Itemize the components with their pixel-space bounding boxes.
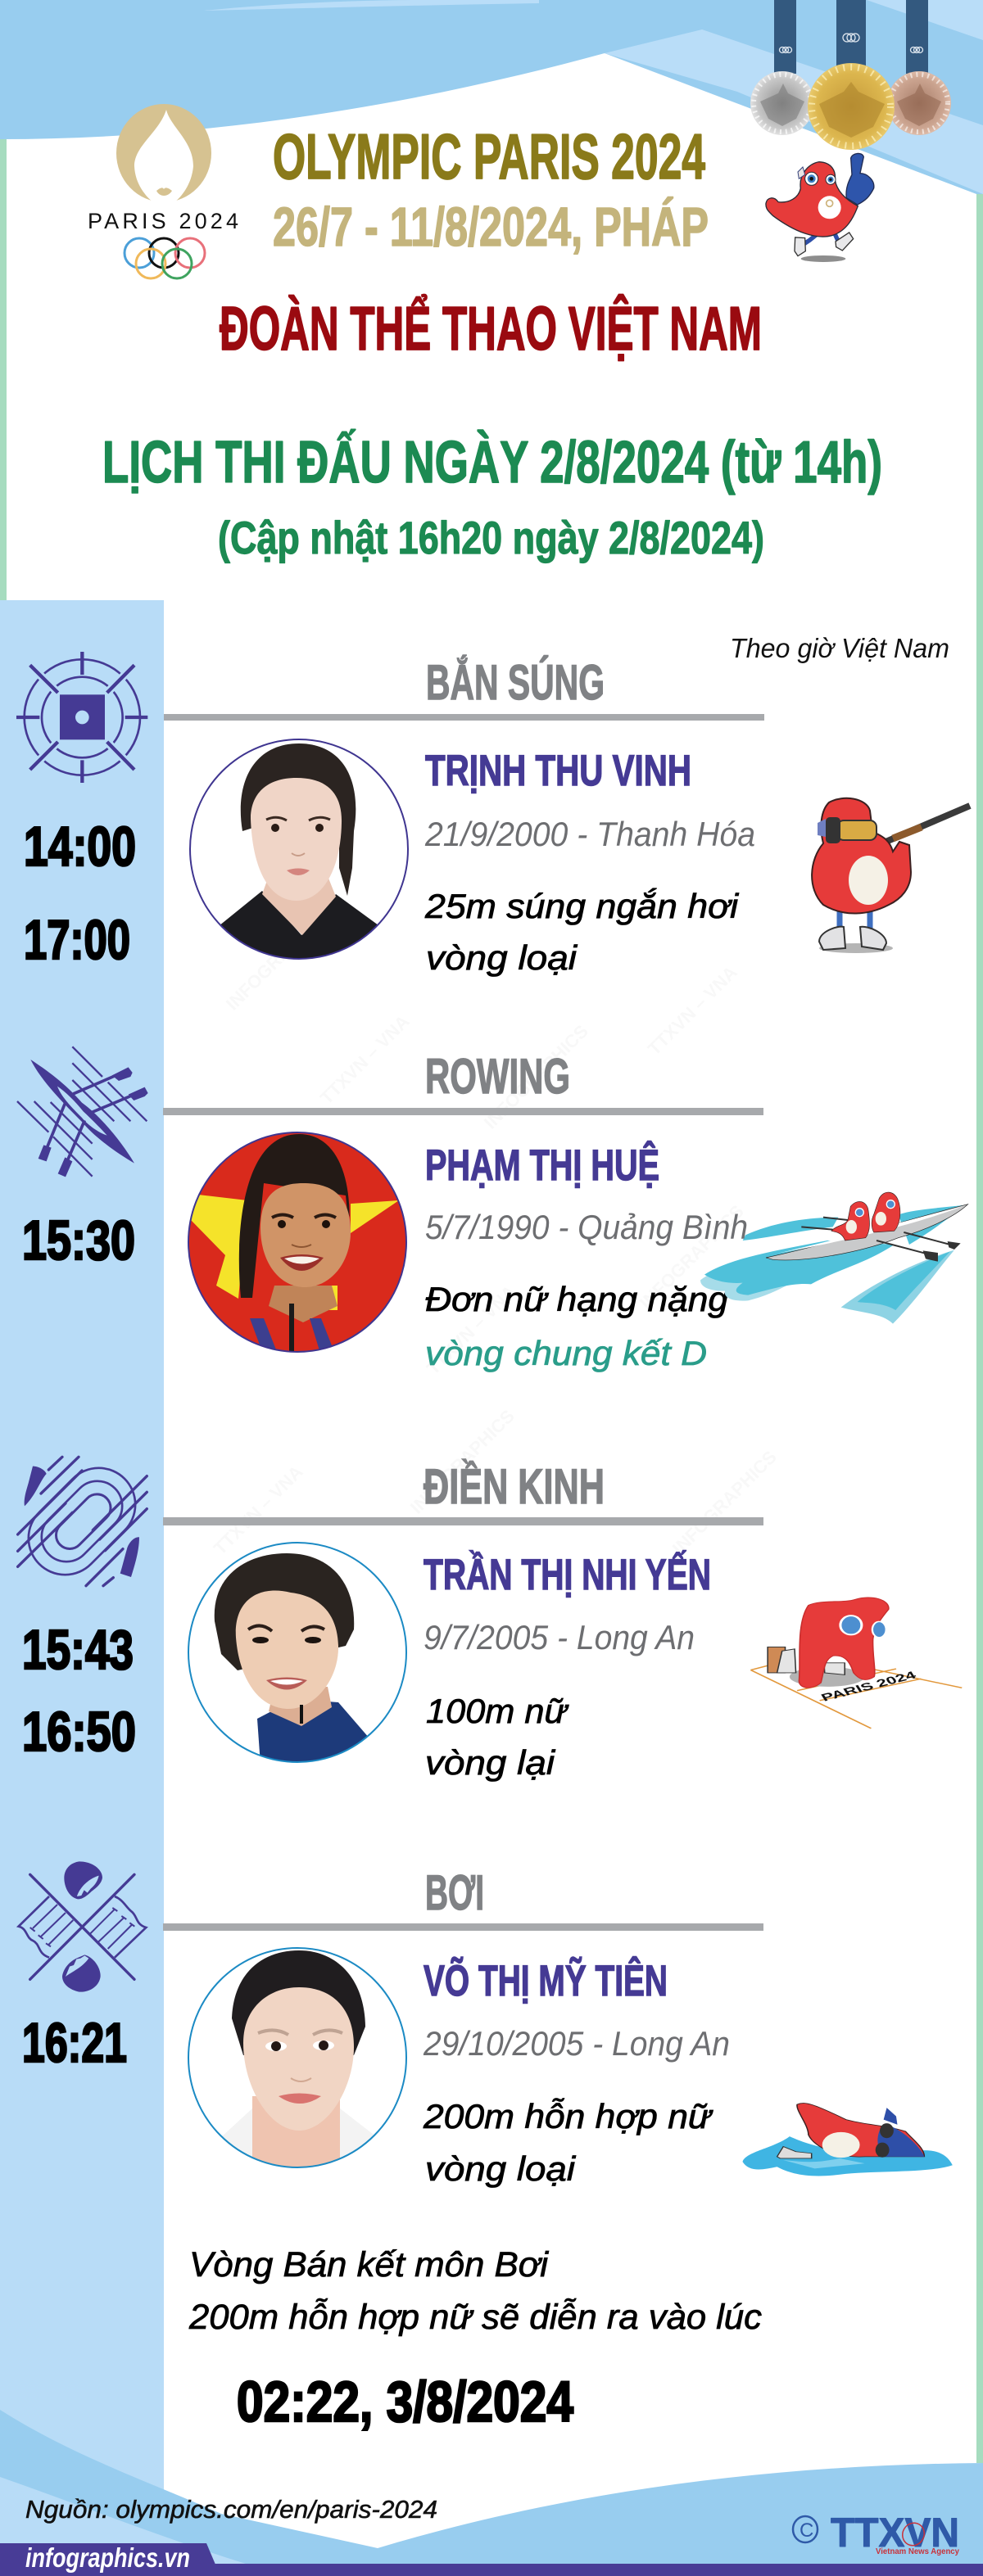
icon: swimming lanes [19, 1861, 146, 1992]
icon: running track [13, 1453, 151, 1590]
agency tagline: Vietnam News Agency [876, 2547, 959, 2556]
title line 1: OLYMPIC PARIS 2024 [273, 120, 705, 192]
birth info: 29/10/2005 - Long An [423, 2024, 730, 2063]
mascots: rowers [700, 1192, 968, 1324]
flame emblem [116, 104, 211, 203]
athlete photo [187, 1131, 410, 1358]
event: vòng loại [426, 938, 578, 977]
mascot: sprinter: PARIS 2024 [818, 1669, 919, 1704]
event: vòng loại [425, 2149, 577, 2188]
gold medal [808, 63, 895, 150]
note: semifinal: 200m hỗn hợp nữ sẽ diễn ra vào lúc [188, 2298, 762, 2337]
watermarks: INFOGRAPHICS [636, 1201, 748, 1313]
times: 17:00 [24, 909, 130, 971]
event: vòng chung kết D [425, 1334, 707, 1372]
event: 200m hỗn hợp nữ [423, 2097, 714, 2135]
category heading: BẮN SÚNG [426, 655, 605, 710]
birth info: 21/9/2000 - Thanh Hóa [424, 815, 755, 853]
athlete photo [187, 1946, 410, 2172]
times: 16:50 [22, 1701, 136, 1763]
event [423, 2097, 714, 2188]
olympic rings [125, 238, 205, 278]
bronze medal [887, 71, 951, 135]
watermarks: TTXVN – VNA [316, 1011, 414, 1109]
copyright mark: C [800, 2520, 813, 2542]
update note: (Cập nhật 16h20 ngày 2/8/2024) [218, 512, 764, 563]
agency name: TTXVN [831, 2510, 959, 2556]
panel: rowing [17, 1046, 968, 1372]
watermarks: TTXVN – VNA [210, 1462, 307, 1559]
title line 2: 26/7 - 11/8/2024, PHÁP [273, 197, 709, 258]
athlete name: TRỊNH THU VINH [425, 747, 691, 795]
icon: shooting target [16, 652, 147, 783]
watermarks: TTXVN – VNA [423, 1281, 520, 1379]
event: 25m súng ngắn hơi [424, 887, 740, 925]
times [24, 816, 136, 971]
event: vòng lại [425, 1743, 556, 1782]
watermarks: INFOGRAPHICS [406, 1406, 519, 1518]
category heading: BƠI [425, 1865, 484, 1920]
watermarks: INFOGRAPHICS [222, 902, 334, 1015]
panel: athletics [13, 1453, 962, 1782]
times [22, 1619, 136, 1763]
silver medal [750, 71, 814, 135]
mascot: sprinter [750, 1598, 962, 1729]
mascot: shooter [812, 798, 970, 953]
ribbons [774, 0, 928, 74]
semifinal date and time: 02:22, 3/8/2024 [237, 2370, 573, 2434]
athlete photo [188, 737, 410, 962]
times: 14:00 [24, 816, 136, 878]
athlete name: VÕ THỊ MỸ TIÊN [424, 1955, 668, 2005]
watermarks: INFOGRAPHICS [668, 1447, 781, 1559]
source: Nguồn: olympics.com/en/paris-2024 [25, 2495, 437, 2524]
panel: swimming [19, 1861, 953, 2188]
site name: infographics.vn [25, 2542, 190, 2573]
watermarks: TTXVN – VNA [644, 962, 741, 1060]
note: semifinal: Vòng Bán kết môn Bơi [189, 2245, 549, 2285]
logo: Paris 2024 [88, 104, 238, 278]
category heading: ROWING [425, 1049, 570, 1104]
athlete photo [187, 1541, 410, 1766]
globe accent [899, 2519, 928, 2550]
category heading: ĐIỀN KINH [424, 1459, 605, 1514]
title [102, 120, 882, 563]
icon: rowing boat [17, 1046, 148, 1177]
time: 16:21 [22, 2012, 127, 2074]
time: 15:30 [22, 1209, 135, 1272]
mascot: swimmer [743, 2104, 953, 2176]
birth info: 5/7/1990 - Quảng Bình [425, 1208, 748, 1246]
athlete name: TRẦN THỊ NHI YẾN [424, 1550, 711, 1599]
birth info: 9/7/2005 - Long An [424, 1618, 695, 1656]
watermarks: INFOGRAPHICS [480, 1021, 592, 1133]
athlete name: PHẠM THỊ HUỆ [425, 1140, 659, 1190]
note: semifinal [188, 2245, 762, 2337]
event [425, 1280, 728, 1372]
event: 100m nữ [426, 1692, 569, 1730]
mascot: running with foam hand [766, 153, 874, 262]
watermarks [210, 902, 781, 1559]
event: Đơn nữ hạng nặng [425, 1280, 728, 1318]
note: Vietnam time: Theo giờ Việt Nam [730, 633, 949, 663]
event [424, 887, 740, 977]
medals [750, 0, 951, 150]
panel: shooting [16, 652, 970, 977]
copyright mark [793, 2516, 818, 2542]
footer waves [0, 2410, 983, 2576]
logo wordmark: PARIS 2024 [88, 209, 238, 233]
event [425, 1692, 569, 1782]
logo: TTXVN [793, 2510, 959, 2556]
times: 15:43 [22, 1619, 134, 1681]
